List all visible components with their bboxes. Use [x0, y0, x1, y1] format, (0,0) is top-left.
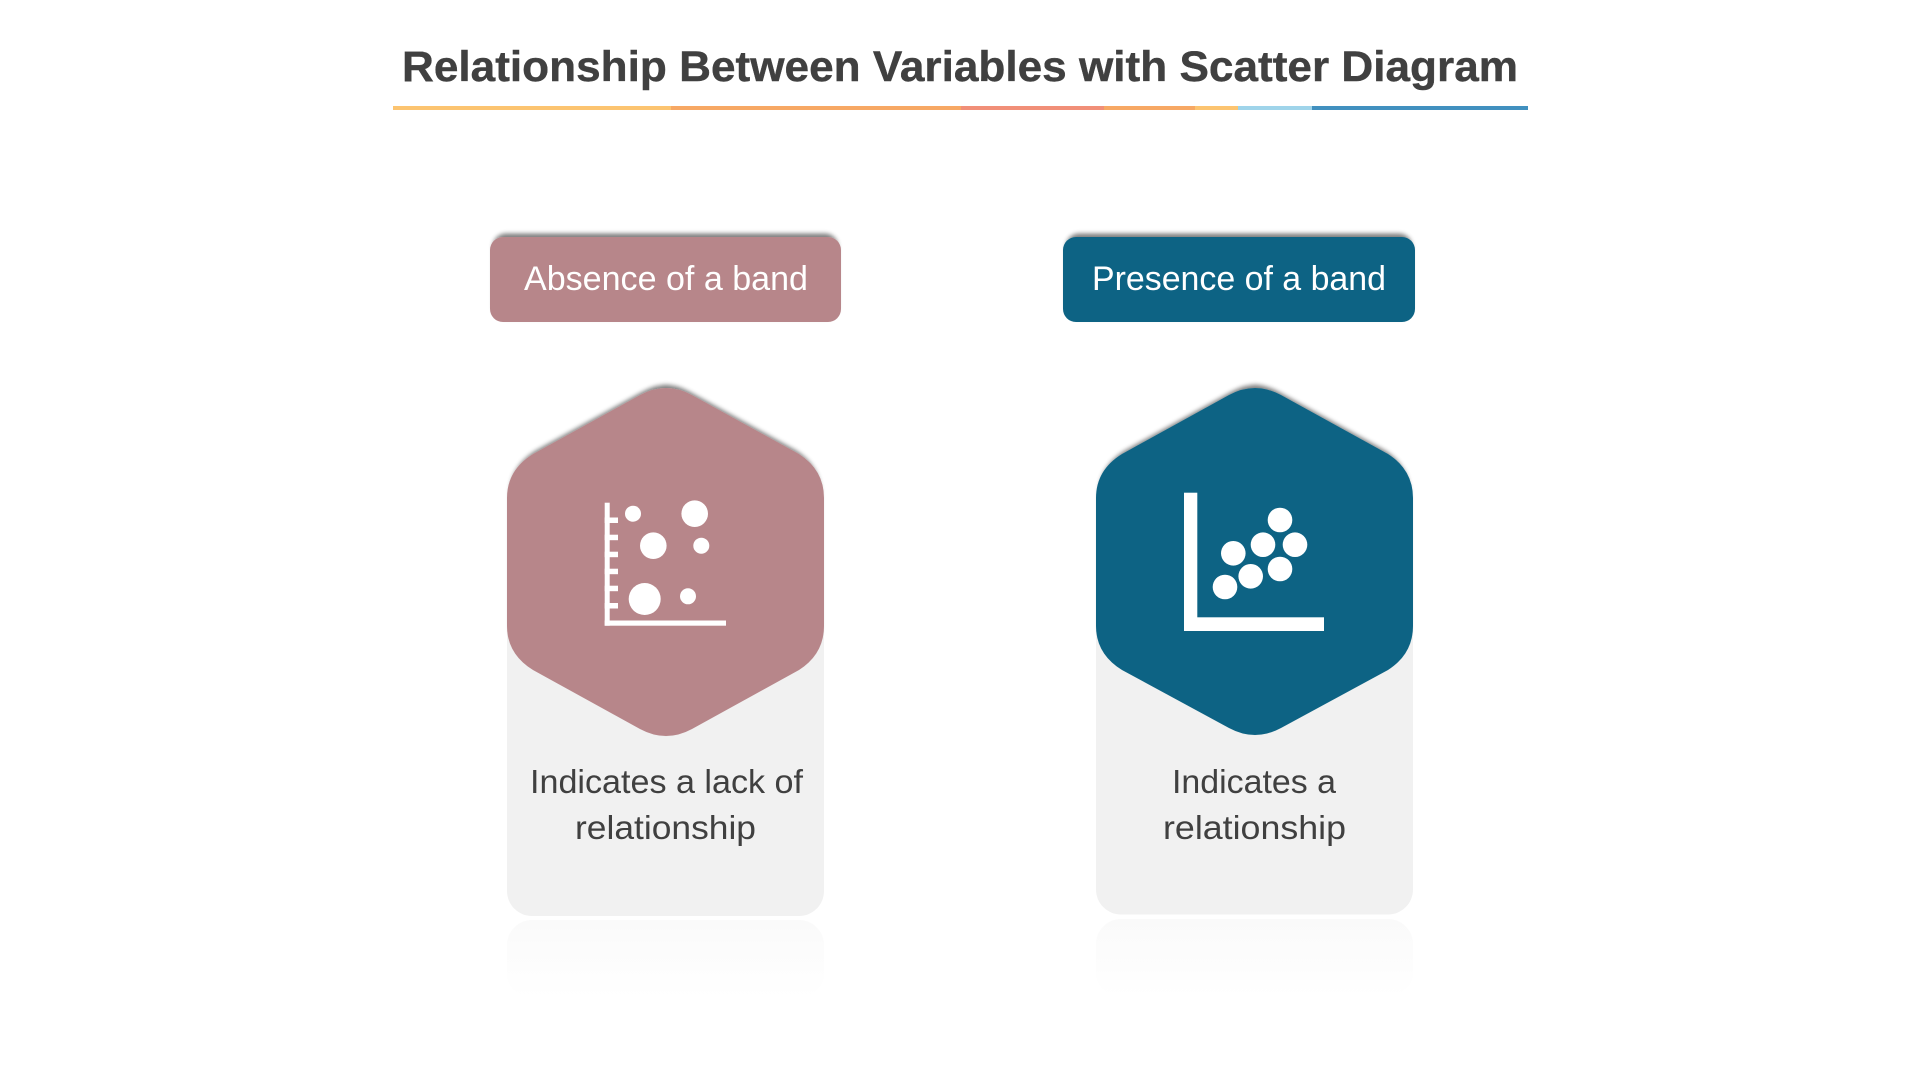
hexagon — [1096, 388, 1413, 735]
description: Indicates a lack of — [530, 763, 804, 800]
card background — [507, 600, 824, 916]
panel: presence of a band — [1063, 237, 1415, 997]
card reflection — [507, 920, 824, 998]
card background — [1096, 600, 1413, 914]
header button: Presence of a band — [1092, 260, 1386, 298]
header button — [1063, 237, 1415, 322]
icon: scattered plot — [605, 500, 726, 626]
description — [1163, 763, 1346, 846]
card reflection — [1096, 919, 1413, 997]
description: Indicates a — [1172, 763, 1337, 800]
description: relationship — [575, 809, 756, 846]
header button — [490, 237, 841, 322]
panel: absence of a band — [490, 237, 841, 998]
icon: correlated scatter plot — [1184, 493, 1324, 631]
description: relationship — [1163, 809, 1346, 846]
title: Relationship Between Variables with Scatter Diagram — [402, 43, 1518, 91]
title underline — [393, 106, 1528, 110]
hexagon — [507, 388, 824, 736]
description — [530, 763, 804, 846]
header button: Absence of a band — [524, 260, 808, 298]
